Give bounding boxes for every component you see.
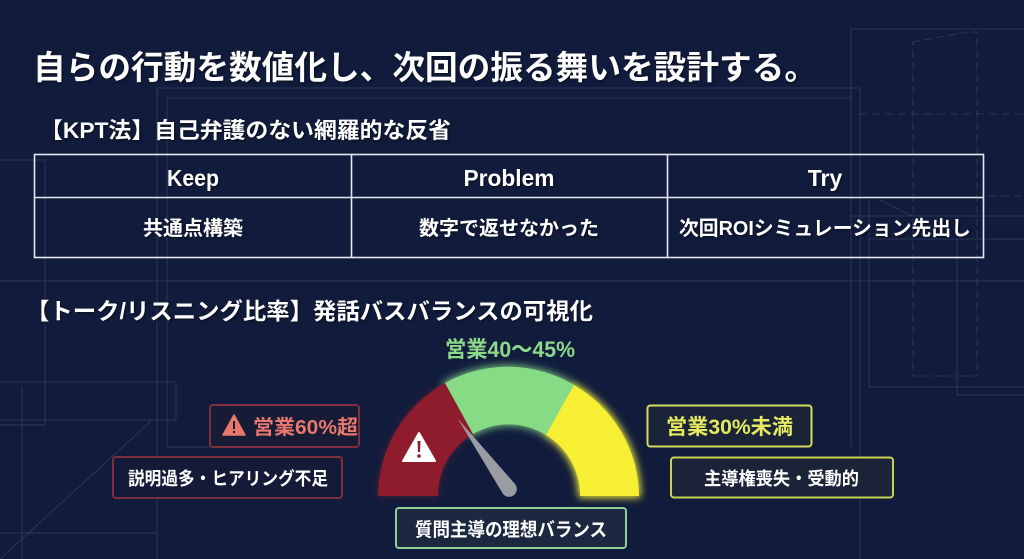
callout: too much explanation [113,457,342,498]
callout: loss of initiative: 主導権喪失・受動的 [704,468,859,489]
callout: under 30 percent: 営業30%未満 [666,416,793,439]
cell: Try: 次回ROIシミュレーション先出し [679,217,971,240]
gauge [378,367,639,497]
gauge segment: green [445,367,574,435]
gauge segment: yellow [546,385,639,496]
heading: talk listening ratio: 【トーク/リスニング比率】発話バスバランスの可視化 [26,298,593,324]
cell: Problem: 数字で返せなかった [419,217,599,240]
callout: under 30 percent [648,406,812,446]
column header: Try: Try [808,165,842,191]
KPT table [34,154,984,258]
callout: over 60 percent: 営業60%超 [253,416,358,439]
gauge label: ideal range: 営業40〜45% [445,337,575,362]
gauge segment: red [378,383,473,496]
column header: Keep: Keep [167,165,219,191]
icon: warning [403,433,435,461]
column header: Problem: Problem [464,165,554,191]
callout: ideal balance [396,508,626,548]
callout: too much explanation: 説明過多・ヒアリング不足 [128,468,328,489]
callout: loss of initiative [671,458,893,498]
cell: Keep: 共通点構築 [143,217,243,240]
icon: warning small [223,415,245,435]
callout: over 60 percent [210,405,359,447]
title: 自らの行動を数値化し、次回の振る舞いを設計する。 [33,49,817,86]
needle [458,419,517,497]
callout: ideal balance: 質問主導の理想バランス [415,519,607,541]
gauge glow [378,367,639,496]
heading: KPT method: 【KPT法】自己弁護のない網羅的な反省 [40,118,451,143]
